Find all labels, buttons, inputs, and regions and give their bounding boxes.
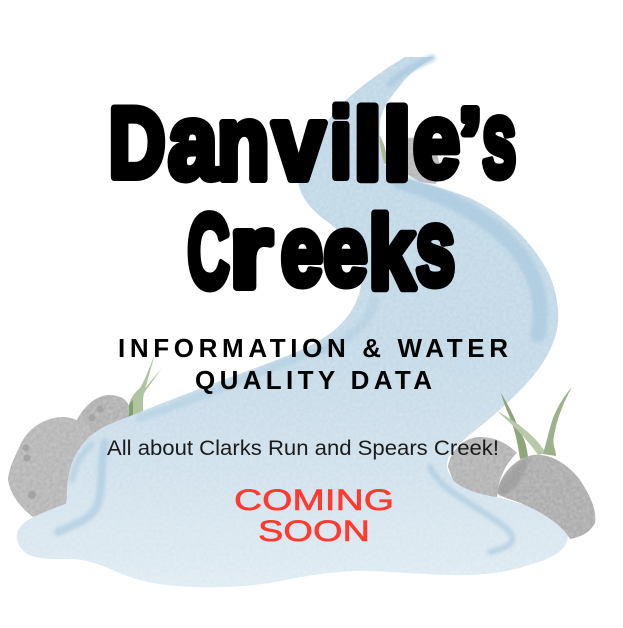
rock right front <box>497 455 595 539</box>
creek darker streaks <box>58 58 540 552</box>
title line 1: n <box>217 84 270 202</box>
creek body <box>17 57 568 587</box>
title line 2: e <box>324 196 367 306</box>
title line 1: v <box>273 84 325 202</box>
subtitle line 2: QUALITY DATA <box>195 365 432 395</box>
rock left small <box>77 395 129 438</box>
soon: SOON <box>258 515 370 548</box>
subtitle line 1: INFORMATION & WATER <box>118 333 508 363</box>
title line 2: s <box>416 186 455 308</box>
rock right front shading <box>497 457 530 496</box>
title line 2: C <box>187 194 230 310</box>
grass left <box>127 354 162 420</box>
title line 1: l <box>354 89 382 201</box>
title <box>109 78 516 310</box>
title line 1: D <box>109 87 165 198</box>
title line 1: i <box>330 88 352 198</box>
title line 1: s <box>482 78 516 200</box>
coming soon notice <box>234 484 394 548</box>
description text: All about Clarks Run and Spears Creek! <box>107 437 499 460</box>
title line 1: a <box>168 82 219 202</box>
title line 2: r <box>230 194 272 310</box>
title line 2: e <box>281 196 323 306</box>
rock behind creek bend <box>400 137 440 184</box>
title line 2: k <box>369 195 415 310</box>
coming: COMING <box>234 484 394 517</box>
rock right back <box>448 437 517 497</box>
title line 1: e <box>413 82 460 200</box>
rock left large <box>8 417 98 517</box>
subtitle <box>118 333 508 395</box>
grass right <box>497 387 572 459</box>
grass behind creek bend <box>377 132 388 165</box>
title line 1: l <box>383 89 411 201</box>
rock spots <box>22 406 104 499</box>
title line 1: ’ <box>459 92 482 188</box>
creek watercolor illustration <box>8 57 595 587</box>
